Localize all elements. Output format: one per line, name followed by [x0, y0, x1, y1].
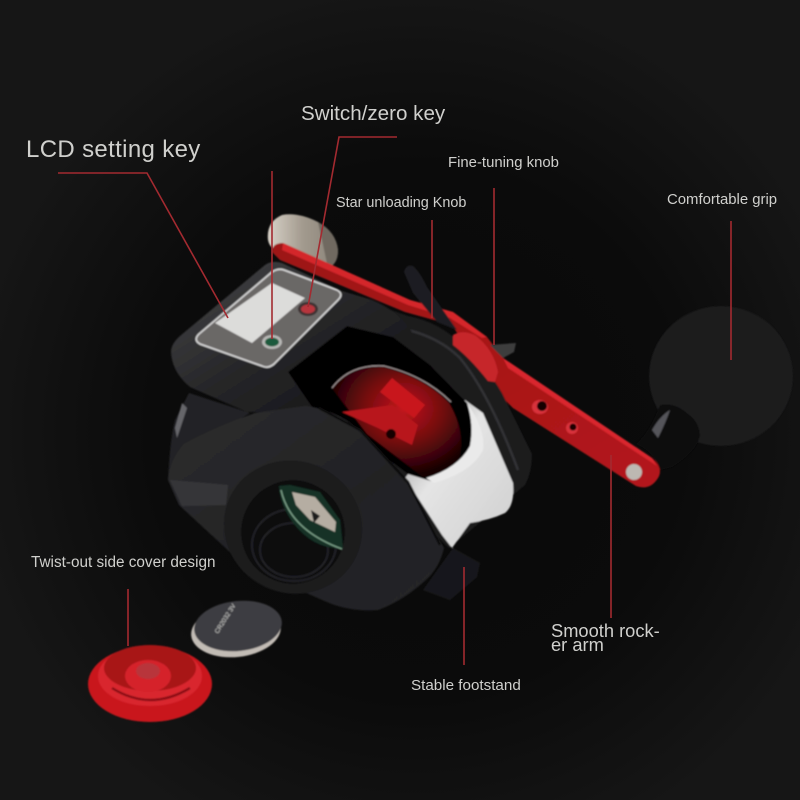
- fishing reel: [168, 214, 793, 616]
- line: switch/zero key: [308, 137, 397, 307]
- label: comfortable grip: Comfortable grip: [667, 192, 777, 208]
- back body: [168, 393, 250, 480]
- footstand: [423, 548, 480, 600]
- top LCD module: [171, 262, 412, 413]
- LCD panel: [196, 269, 341, 367]
- fine-tuning knob: [453, 332, 498, 382]
- rocker arm: [272, 243, 660, 487]
- LCD screen: [215, 283, 305, 343]
- line: second key: [271, 171, 273, 339]
- battery coin: [189, 597, 284, 662]
- line: smooth rocker arm: [610, 455, 612, 618]
- line: twist-out cover: [127, 589, 129, 646]
- line: comfortable grip: [730, 221, 732, 360]
- silver plate: [405, 400, 513, 548]
- icon: green button: [262, 335, 282, 349]
- label: stable footstand: Stable footstand: [411, 677, 521, 694]
- label: smooth rocker arm: Smooth rock-: [551, 620, 660, 641]
- red side cap: [88, 645, 212, 722]
- label: switch/zero key: Switch/zero key: [301, 102, 446, 125]
- label: smooth rocker arm: er arm: [551, 634, 604, 655]
- bail lever: [404, 266, 457, 330]
- line: LCD setting key: [58, 173, 228, 318]
- spool window: [288, 326, 483, 483]
- icon: red button: [298, 302, 318, 316]
- lens opening: [202, 438, 384, 616]
- label: LCD setting key: LCD setting key: [26, 136, 201, 163]
- side cover: [168, 406, 444, 616]
- label: star unloading knob: Star unloading Knob: [336, 195, 466, 211]
- coin marking: CR2032 3V: [214, 602, 238, 635]
- leader lines: [58, 137, 731, 665]
- line: fine-tuning knob: [493, 188, 495, 345]
- line: star unloading knob: [431, 220, 433, 318]
- label: smooth rocker arm: [551, 620, 660, 655]
- right side frame: [290, 296, 532, 548]
- icon: rear silver knob: [268, 214, 338, 268]
- label: fine-tuning knob: Fine-tuning knob: [448, 155, 559, 171]
- comfortable grip handle: [636, 306, 793, 470]
- icon: small tab: [490, 343, 516, 358]
- label: twist-out side cover design: Twist-out side cover design: [31, 554, 216, 571]
- line: stable footstand: [463, 567, 465, 665]
